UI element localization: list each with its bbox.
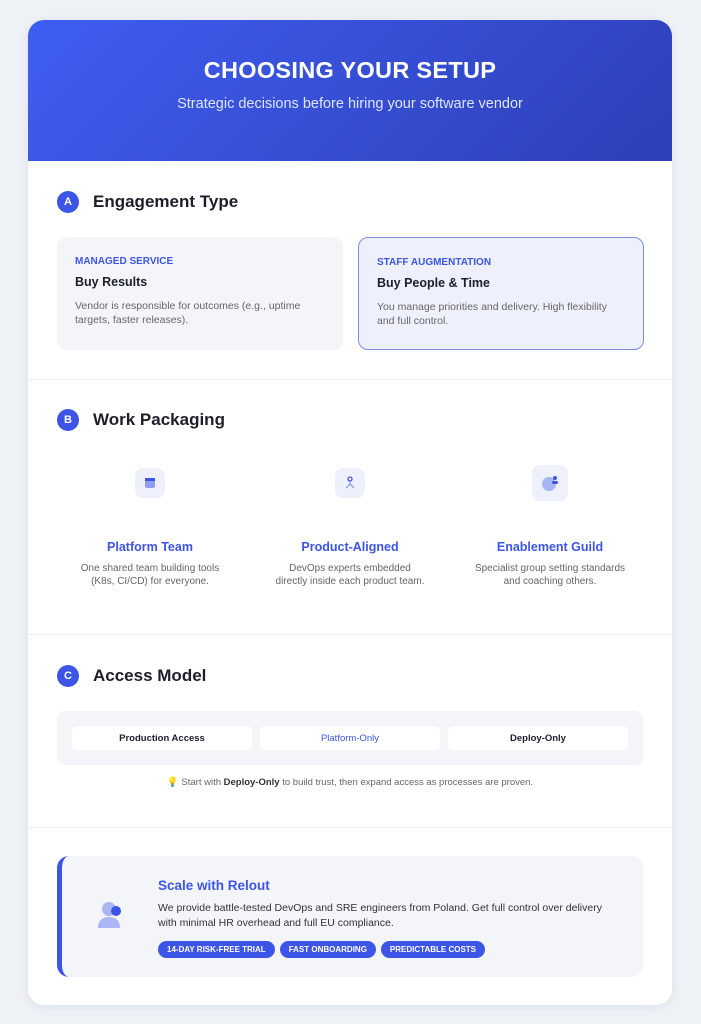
card: staff augmentation xyxy=(358,237,644,350)
column: product-aligned: DevOps experts embedded xyxy=(289,563,411,574)
heading B: Work Packaging xyxy=(93,410,225,429)
column: product-aligned xyxy=(276,468,424,587)
card: staff augmentation: You manage priorities and delivery. High flexibility and full control. xyxy=(377,301,607,327)
access options: Deploy-Only xyxy=(510,732,566,744)
card: managed service: Buy Results xyxy=(75,275,147,289)
heading B: B xyxy=(64,414,72,426)
header xyxy=(28,20,672,161)
tip: 💡 Start with Deploy-Only to build trust, then expand access as processes are proven. xyxy=(167,777,533,788)
CTA text: 14-DAY RISK-FREE TRIAL xyxy=(167,945,266,954)
card: staff augmentation: Buy People & Time xyxy=(377,276,490,290)
CTA text: Scale with Relout xyxy=(158,878,270,893)
card: managed service xyxy=(57,237,343,350)
column: enablement guild xyxy=(475,465,625,587)
column: platform team: One shared team building tools xyxy=(81,563,219,574)
CTA text: We provide battle-tested DevOps and SRE engineers from Poland. Get full control over delivery with minimal HR overhead and full EU compliance. xyxy=(158,902,602,929)
heading C: Access Model xyxy=(93,666,206,685)
card: staff augmentation: STAFF AUGMENTATION xyxy=(377,257,491,268)
CTA text xyxy=(158,878,602,958)
CTA panel xyxy=(57,856,643,977)
icon: person xyxy=(98,902,121,928)
access options xyxy=(57,711,643,765)
column: enablement guild: and coaching others. xyxy=(504,576,596,587)
access options: Production Access xyxy=(119,732,205,744)
heading C: C xyxy=(64,670,72,682)
column: product-aligned: directly inside each product team. xyxy=(276,576,424,587)
column: enablement guild: Specialist group setting standards xyxy=(475,563,625,574)
column: enablement guild: Enablement Guild xyxy=(497,540,603,554)
header: Strategic decisions before hiring your software vendor xyxy=(177,96,523,112)
column: product-aligned: Product-Aligned xyxy=(301,540,399,554)
heading B xyxy=(57,409,225,431)
card: managed service: MANAGED SERVICE xyxy=(75,256,173,267)
heading C xyxy=(57,665,206,687)
column: platform team: (K8s, CI/CD) for everyone. xyxy=(91,576,209,587)
CTA text: FAST ONBOARDING xyxy=(289,945,367,954)
column: platform team xyxy=(81,468,219,587)
heading A xyxy=(57,191,238,213)
access options: Platform-Only xyxy=(321,732,379,744)
CTA text: PREDICTABLE COSTS xyxy=(390,945,476,954)
header: CHOOSING YOUR SETUP xyxy=(204,57,496,83)
column: platform team: Platform Team xyxy=(107,540,193,554)
card: managed service: Vendor is responsible for outcomes (e.g., uptime targets, faster releases). xyxy=(75,300,300,326)
heading A: A xyxy=(64,196,72,208)
heading A: Engagement Type xyxy=(93,192,238,211)
